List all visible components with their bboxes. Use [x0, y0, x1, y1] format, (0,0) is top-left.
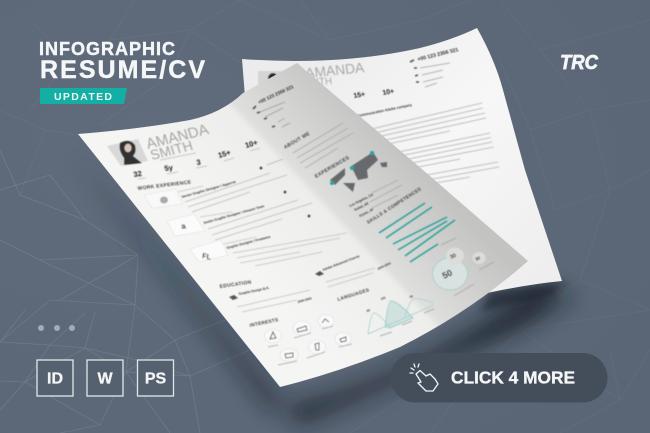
heading: skills and competences: SKILLS & COMPETENCES — [366, 186, 422, 225]
languages chart: 100 — [380, 296, 386, 301]
education entry 1 — [229, 286, 312, 312]
languages chart: 50 — [409, 294, 414, 299]
call to action button: CLICK 4 MORE — [451, 368, 575, 388]
format badge: ID: ID — [47, 370, 63, 388]
heading: experiences: EXPERIENCES — [314, 155, 351, 180]
back sheet stats — [353, 88, 395, 100]
skill bubbles: 50 — [441, 268, 454, 281]
heading: work experience: WORK EXPERIENCE — [137, 179, 192, 192]
heading: interests: INTERESTS — [249, 317, 279, 329]
skill bubbles: 30 — [474, 255, 481, 262]
title: RESUME/CV — [40, 56, 205, 84]
profile photo — [107, 139, 148, 166]
format badge: PS: PS — [145, 370, 166, 388]
updated badge: UPDATED — [54, 91, 112, 103]
work entry: FL logo box: FL — [202, 251, 212, 262]
back sheet contact details: +00 123 2356 321 — [417, 47, 459, 63]
education entry 1: Graphic Design B.A. — [238, 286, 270, 296]
work entry 1 text — [178, 173, 287, 212]
heading: languages: LANGUAGES — [337, 287, 370, 303]
profile stats: 10+ — [244, 138, 259, 150]
back sheet name: SMITH — [301, 76, 333, 89]
work entry: Apple logo box — [144, 189, 183, 208]
title — [39, 39, 205, 84]
experience locations: Dubai, AE — [354, 201, 370, 212]
experience locations — [349, 180, 402, 218]
heading: about me: ABOUT ME — [283, 131, 312, 151]
back resume sheet — [242, 28, 562, 300]
experience locations: Los Angeles, CA — [349, 192, 374, 208]
contact details — [253, 84, 295, 127]
timeline dots — [260, 167, 310, 217]
TRC logo: TRC — [560, 52, 599, 74]
heading: education: EDUCATION — [219, 280, 252, 290]
pagination dots — [38, 325, 75, 331]
back sheet letter body text — [350, 103, 499, 198]
skill bubbles — [432, 238, 494, 296]
interest icons — [264, 314, 352, 365]
format badge: ID — [37, 360, 73, 396]
work entry 3 text — [224, 233, 347, 266]
work entry: FL logo box — [190, 240, 228, 262]
back sheet stats: 15+ — [353, 91, 366, 100]
skill bubbles: 30 — [449, 253, 457, 261]
profile stats: 15+ — [217, 148, 232, 160]
back sheet name: AMANDA — [304, 59, 366, 81]
back sheet photo — [258, 71, 284, 95]
front resume sheet — [78, 63, 528, 387]
experience locations: Kyoto, JP — [359, 207, 375, 218]
back sheet contact details — [410, 47, 459, 87]
profile stats: 5y — [164, 163, 174, 173]
sheet shadows — [70, 150, 575, 425]
updated badge — [40, 88, 127, 104]
profile stats: 32 — [133, 169, 143, 179]
education entry 2: 2000-2004 — [377, 261, 391, 271]
call to action button — [390, 353, 608, 402]
title: INFOGRAPHIC — [39, 39, 175, 59]
education entry 2 — [315, 254, 391, 287]
format badge: W — [87, 360, 123, 396]
back sheet stats: 10+ — [382, 88, 395, 97]
format badge: PS — [138, 360, 174, 396]
format badge: W: W — [97, 370, 113, 388]
name: Amanda Smith: SMITH — [148, 137, 195, 163]
education entry 1: 2000-2004 — [297, 296, 312, 304]
work entry: Amazon logo box — [167, 214, 205, 236]
skills bars — [379, 203, 455, 262]
back sheet name — [301, 59, 366, 89]
world map — [330, 151, 387, 192]
icon: pointing hand — [410, 364, 438, 391]
work entry 2 text: Senior Graphic Designer / Amazon Team — [203, 204, 265, 225]
profile stats: 3 — [196, 158, 201, 167]
work entry 2 text — [200, 200, 312, 240]
education entry 2: Adobe Advanced Course — [322, 254, 360, 272]
back sheet letter heading: Communication Adobe company — [357, 103, 413, 118]
work entry 1 text: Senior Graphic Designer / Apperrie — [181, 180, 236, 199]
contact details: +00 123 2356 321 — [257, 84, 295, 106]
languages chart — [366, 294, 434, 336]
about me text — [293, 123, 353, 168]
name: Amanda Smith: AMANDA — [144, 122, 211, 153]
work entry 3 text: Graphic Designer / Freelance — [226, 235, 271, 250]
profile stats — [133, 138, 260, 179]
work entry: Amazon logo box: a — [180, 221, 187, 231]
languages chart: 80 — [366, 308, 371, 313]
